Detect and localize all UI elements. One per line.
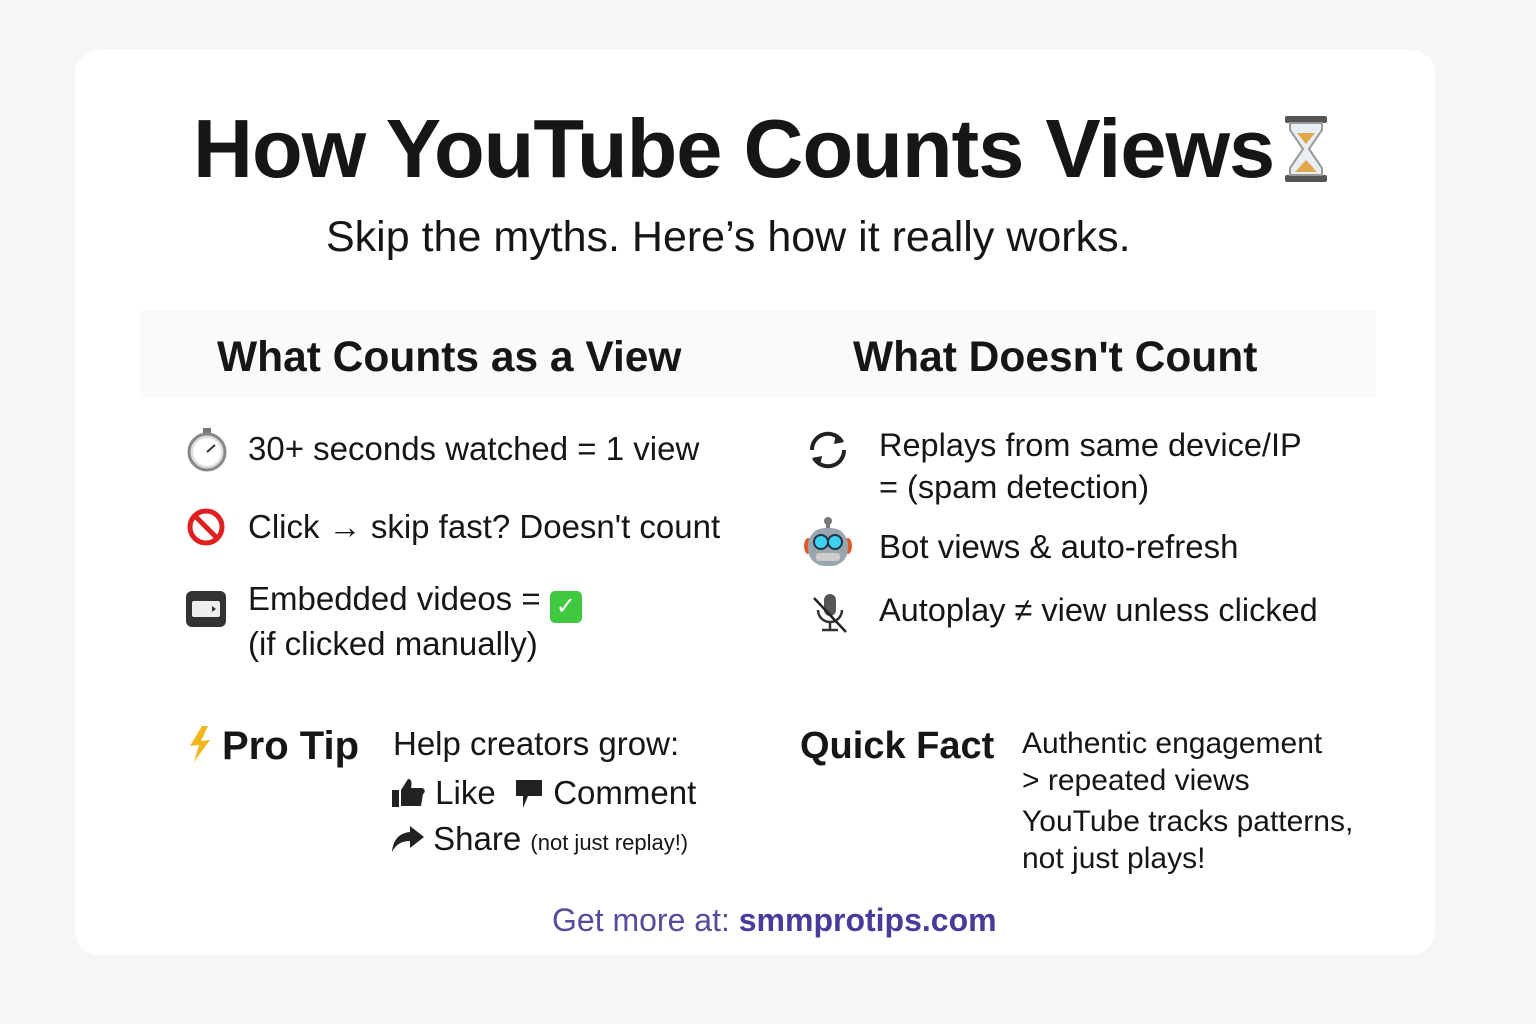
title: How YouTube Counts Views (193, 102, 1274, 195)
text: bot views: Bot views & auto-refresh (879, 528, 1238, 565)
heading: what doesn't count: What Doesn't Count (853, 334, 1257, 381)
text: click skip: Click → skip fast? Doesn't count (248, 508, 720, 545)
icon: embed (186, 591, 226, 627)
icon: muted mic (813, 594, 847, 633)
text: youtube tracks: not just plays! (1022, 842, 1205, 875)
heading: pro tip: Pro Tip (222, 724, 359, 768)
panel: pro tip (190, 724, 696, 857)
text: help creators: Help creators grow: (393, 725, 679, 762)
subtitle: Skip the myths. Here’s how it really works. (326, 213, 1131, 261)
icon: lightning (190, 726, 210, 762)
icon: replay (810, 432, 846, 468)
text: embedded: (if clicked manually) (248, 625, 538, 662)
text: youtube tracks: YouTube tracks patterns, (1022, 805, 1353, 838)
text: replays (879, 427, 1302, 505)
panel header band (140, 310, 1376, 398)
text: replays: Replays from same device/IP (879, 427, 1302, 463)
text: autoplay: Autoplay ≠ view unless clicked (879, 592, 1318, 628)
heading: what counts: What Counts as a View (217, 334, 681, 381)
panel: doesn't count (804, 427, 1318, 633)
text: replays: = (spam detection) (879, 469, 1149, 505)
actions: like comment share: Share (not just replay!) (433, 820, 688, 857)
text: fact: Authentic engagement (1022, 727, 1322, 760)
text: embedded: Embedded videos = (248, 580, 541, 617)
text: fact (1022, 727, 1322, 797)
text: embedded (248, 580, 582, 662)
card background (75, 50, 1435, 955)
panel: counts (186, 428, 720, 662)
text: 30+ seconds: 30+ seconds watched = 1 view (248, 430, 699, 467)
icon: prohibited (188, 508, 224, 546)
text: fact: > repeated views (1022, 764, 1250, 797)
text: youtube tracks (1022, 805, 1353, 875)
heading: quick fact: Quick Fact (800, 725, 994, 767)
text: embedded: ✓ (556, 593, 576, 620)
actions: like comment share (392, 774, 696, 857)
actions: like comment share: Like Comment (435, 774, 696, 811)
panel: quick fact (800, 725, 1353, 875)
footer link: Get more at: smmprotips.com (552, 902, 997, 938)
icon: stopwatch (188, 428, 226, 472)
icon: robot (804, 517, 852, 566)
icon: hourglass (1285, 116, 1327, 182)
